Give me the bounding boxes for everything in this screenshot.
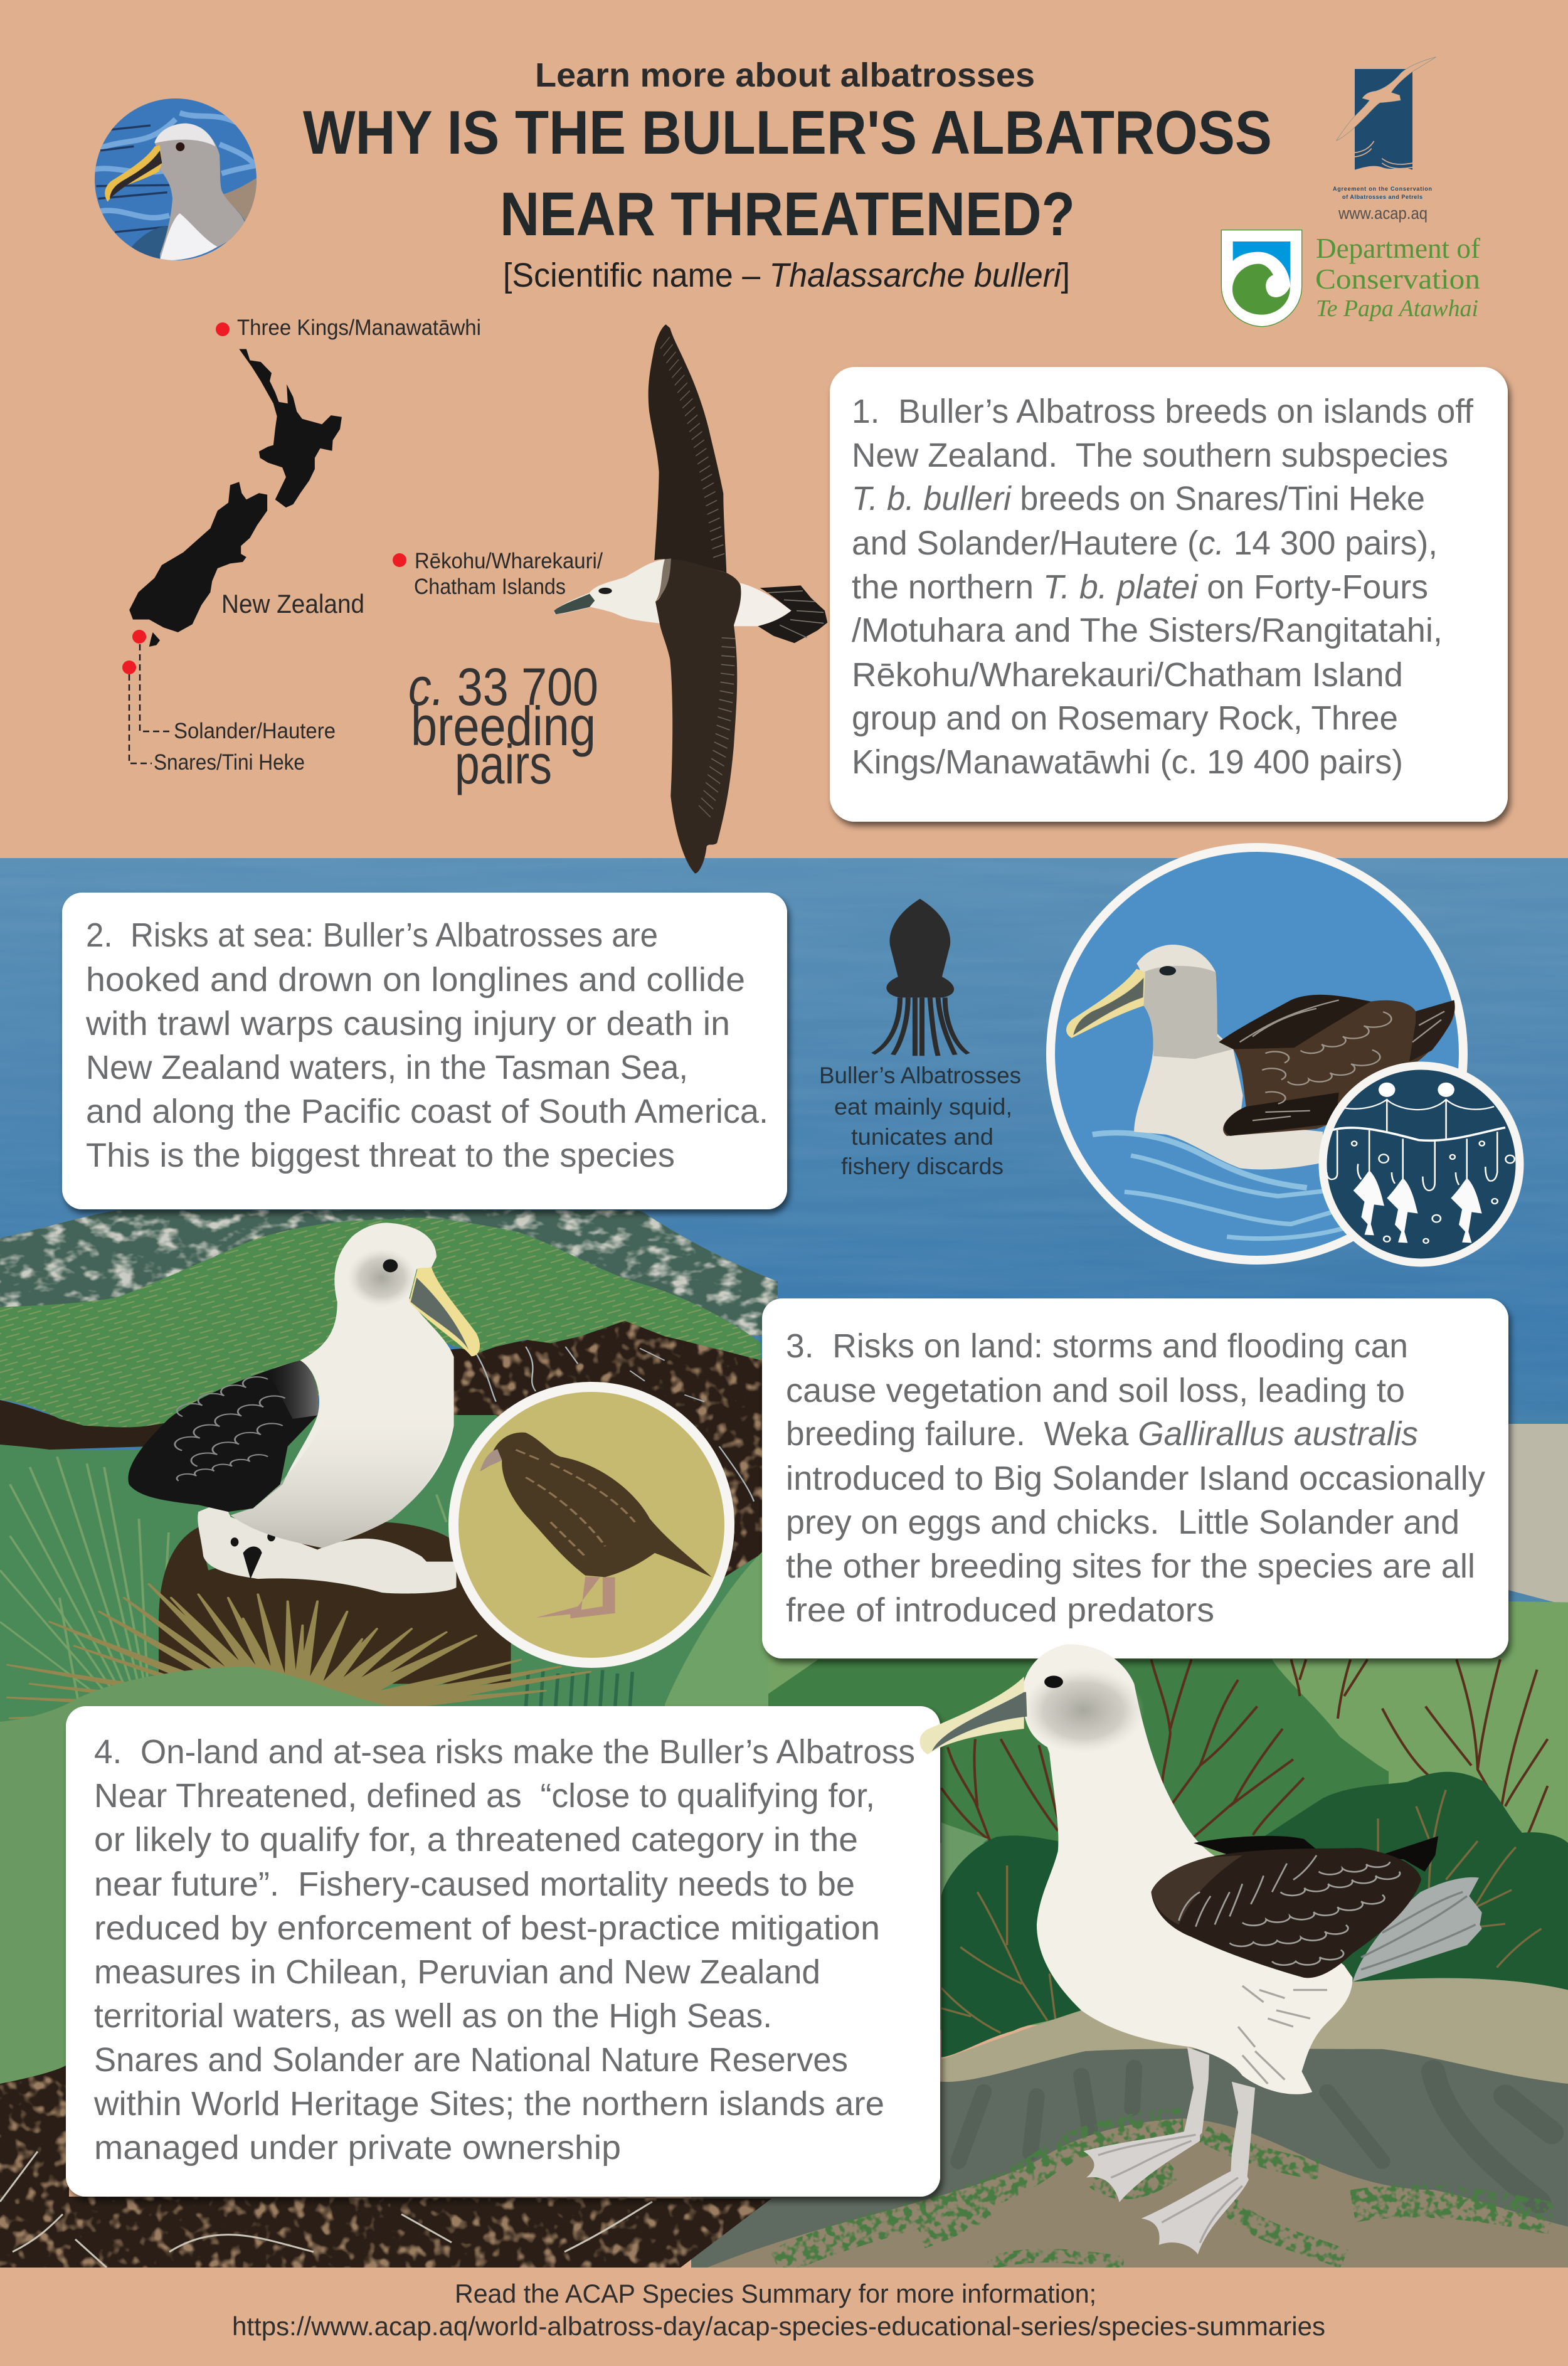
green hill (0, 1217, 761, 1427)
white breast (160, 213, 218, 260)
bill plate (932, 1692, 1027, 1751)
panel 1 text: Kings/Manawatāwhi (c. 19 400 pairs) (852, 743, 1403, 781)
panel 4 text: Snares and Solander are National Nature Reserves (94, 2041, 848, 2079)
panel 2: risks at sea (62, 893, 787, 1209)
map labels: Chatham Islands (414, 575, 566, 599)
panel 4 text: 4. On-land and at-sea risks make the Buller’s Albatross (94, 1733, 915, 1771)
adult body (231, 1223, 454, 1548)
branches behind (941, 1660, 1548, 1841)
eye (176, 142, 184, 151)
water (94, 98, 259, 263)
ACAP logo (1337, 57, 1436, 170)
left soil bank (0, 1400, 179, 1450)
grey rock (691, 2049, 1568, 2271)
map labels: New Zealand (221, 589, 364, 618)
net gear (1327, 1083, 1515, 1243)
light green background (759, 1590, 1568, 2039)
panel 1 text: /Motuhara and The Sisters/Rangitatahi, (852, 612, 1443, 649)
wing shadow fade (268, 1361, 318, 1419)
lower left hill (0, 1667, 439, 2095)
wing feathers (175, 1377, 285, 1481)
panel 4 text: Near Threatened, defined as “close to qualifying for, (94, 1777, 875, 1815)
photo of albatross head (94, 98, 259, 263)
diet caption: tunicates and (851, 1124, 993, 1150)
panel 1 text: New Zealand. The southern subspecies (852, 437, 1448, 474)
crown (155, 124, 215, 146)
diet caption: Buller’s Albatrosses (819, 1063, 1021, 1088)
rock (132, 226, 169, 262)
swimming bird (1066, 945, 1455, 1239)
panel 2 text: 2. Risks at sea: Buller’s Albatrosses are (86, 916, 658, 954)
footer text: Read the ACAP Species Summary for more information; (455, 2279, 1096, 2308)
wing (1151, 1848, 1421, 1978)
panel 2 text: with trawl warps causing injury or death in (85, 1005, 730, 1042)
heading block (303, 56, 1272, 294)
head shading (1022, 1668, 1145, 1753)
head and neck (554, 559, 665, 623)
chick (198, 1502, 457, 1594)
panel 2 text: This is the biggest threat to the species (86, 1137, 675, 1174)
DOC wordmark (1315, 232, 1481, 322)
footer band (0, 2268, 1568, 2366)
nest with sitting albatross and chick (128, 1223, 511, 1684)
panel 2 text: New Zealand waters, in the Tasman Sea, (86, 1049, 688, 1086)
panel 1 text: T. b. bulleri breeds on Snares/Tini Heke (852, 480, 1425, 517)
water dark streaks (96, 125, 171, 232)
south island (129, 482, 267, 632)
standing albatross (919, 1644, 1482, 2254)
weka bird (480, 1433, 712, 1618)
lower wing feathers (702, 638, 729, 818)
panel 4 text: reduced by enforcement of best-practice mitigation (94, 1909, 880, 1947)
bill (919, 1677, 1024, 1754)
panel 1 text: group and on Rosemary Rock, Three (852, 699, 1398, 737)
breeding pairs statistic: pairs (455, 733, 552, 795)
panel 4: conclusion (66, 1706, 940, 2197)
face shading (347, 1249, 416, 1307)
ACAP text: www.acap.aq (1338, 204, 1428, 223)
wing shoulder (1151, 1855, 1242, 1924)
bird (1337, 57, 1436, 141)
moss patches (776, 2123, 1552, 2263)
ground mound (700, 2118, 1568, 2271)
chick face (231, 1532, 275, 1579)
panel 3 text: breeding failure. Weka Gallirallus australis (786, 1415, 1418, 1453)
foot lines (1098, 2135, 1242, 2243)
wing (128, 1361, 318, 1512)
map markers (122, 322, 406, 674)
mid-green bush (759, 1660, 1389, 1843)
panel 3 text: the other breeding sites for the species are all (786, 1547, 1475, 1585)
rocky mountain (0, 1207, 822, 1339)
right soil bank (450, 1321, 762, 1577)
sea disk (1051, 847, 1463, 1260)
map labels: Snares/Tini Heke (154, 750, 305, 775)
footer text: https://www.acap.aq/world-albatross-day/acap-species-educational-series/species-summaries (232, 2311, 1325, 2341)
stewart island (149, 632, 160, 647)
legs (1183, 2047, 1255, 2192)
blue panel (1355, 69, 1412, 170)
weka circle (453, 1387, 729, 1663)
diet caption: eat mainly squid, (834, 1094, 1012, 1120)
panel 3 text: introduced to Big Solander Island occasionally (786, 1460, 1485, 1497)
body and lower wing (655, 559, 743, 874)
panel 3: risks on land (762, 1298, 1508, 1658)
left dark bush (941, 1835, 1081, 2057)
meadow, soil and nest ground (0, 1317, 771, 1731)
DOC wordmark: Department of (1316, 232, 1481, 264)
dashed leader lines (129, 644, 172, 763)
main title: NEAR THREATENED? (500, 179, 1075, 248)
diet caption (819, 1063, 1021, 1179)
nest (159, 1522, 511, 1684)
panel 2 text: and along the Pacific coast of South America. (86, 1093, 768, 1130)
squid silhouette (873, 899, 968, 1056)
panel 2 text (85, 916, 768, 1174)
map labels: Three Kings/Manawatāwhi (237, 316, 481, 340)
rump (734, 583, 792, 626)
panel 1 text: the northern T. b. platei on Forty-Fours (852, 568, 1428, 606)
panel 3 text: 3. Risks on land: storms and flooding can (786, 1327, 1408, 1365)
diet caption: fishery discards (841, 1154, 1004, 1179)
panel 4 text: managed under private ownership (94, 2129, 621, 2167)
breeding pairs statistic: breeding (411, 695, 596, 757)
squid arms (873, 997, 968, 1056)
right grey cliff (1508, 1424, 1568, 1606)
meadow grass blades (0, 1456, 632, 1708)
map labels: Rēkohu/Wharekauri/ (415, 549, 603, 573)
map of New Zealand (129, 349, 342, 647)
body (1022, 1644, 1353, 2094)
main title (303, 98, 1272, 248)
tail feather lines (1361, 1892, 1476, 1970)
net circle: longline hooks and fish (1323, 1066, 1520, 1263)
sea circle: albatross on water (1051, 847, 1463, 1260)
footer text (232, 2279, 1325, 2341)
panel 3 text (786, 1327, 1485, 1629)
map labels: Solander/Hautere (174, 719, 336, 743)
breeding pairs statistic: c. 33 700 (408, 657, 598, 716)
ACAP text: of Albatrosses and Petrels (1342, 194, 1422, 200)
tussock grass (8, 1584, 590, 1718)
map labels (154, 316, 603, 775)
brown back (223, 178, 257, 224)
learn more: Learn more about albatrosses (535, 56, 1035, 94)
bill plate (110, 151, 162, 199)
rock streaks (958, 2067, 1552, 2202)
tail lines (767, 591, 824, 638)
panel 4 text: measures in Chilean, Peruvian and New Zealand (94, 1953, 820, 1991)
bill (105, 146, 162, 202)
tail (758, 585, 827, 643)
body shading (231, 1416, 454, 1548)
right dark bush (1264, 1772, 1568, 1990)
lower soil (0, 2057, 778, 2268)
feet (1083, 2126, 1249, 2254)
panel 3 text: free of introduced predators (786, 1591, 1214, 1629)
water highlights (94, 113, 257, 218)
panel 4 text (93, 1733, 915, 2167)
eye (598, 588, 612, 594)
soil veins (476, 1347, 754, 1502)
bill plate (411, 1278, 469, 1350)
main title: WHY IS THE BULLER'S ALBATROSS (303, 98, 1272, 167)
tan branches on bushes (941, 1790, 1541, 2033)
panel 2 text: hooked and drown on longlines and collide (86, 961, 745, 999)
panel 3 text: prey on eggs and chicks. Little Solander and (786, 1504, 1459, 1541)
panel 1 text: Rēkohu/Wharekauri/Chatham Island (852, 656, 1403, 694)
panel 1 text (852, 393, 1474, 781)
breeding pairs statistic (408, 657, 598, 795)
waves (1355, 141, 1412, 169)
lower right scenery (691, 1590, 1568, 2271)
tail (1353, 1877, 1482, 1981)
bill (554, 594, 595, 614)
DOC wordmark: Te Papa Atawhai (1316, 295, 1478, 322)
upper wing feathers (665, 342, 719, 558)
ocean background (0, 858, 1568, 1636)
DOC wordmark: Conservation (1315, 263, 1480, 295)
panel 4 text: or likely to qualify for, a threatened category in the (94, 1821, 858, 1859)
DOC shield (1221, 230, 1302, 327)
wing feather rows (1179, 1855, 1400, 1965)
panel 1: breeding (830, 367, 1508, 822)
panel 4 text: territorial waters, as well as on the High Seas. (94, 1997, 772, 2035)
panel 1 text: 1. Buller’s Albatross breeds on islands off (852, 393, 1474, 430)
panel 1 text: and Solander/Hautere (c. 14 300 pairs), (852, 524, 1438, 562)
breast feathers (1238, 1986, 1327, 2084)
squid mantle (886, 899, 954, 997)
ACAP text: Agreement on the Conservation (1333, 186, 1432, 192)
panel 3 text: cause vegetation and soil loss, leading to (786, 1372, 1405, 1409)
right hill by weka circle (665, 1546, 768, 1712)
back wing tips (1194, 1836, 1438, 1872)
eye (1044, 1676, 1063, 1688)
north island (239, 349, 342, 507)
pale strip (941, 1823, 988, 1896)
ACAP text (1333, 186, 1432, 223)
upper wing (649, 324, 726, 573)
net disk (1323, 1066, 1520, 1263)
weka background (453, 1387, 729, 1663)
neck shade (655, 558, 671, 602)
sand band (941, 1978, 1568, 2088)
flying albatross (554, 324, 827, 874)
eye (383, 1260, 398, 1272)
neck and head (155, 124, 246, 260)
panel 4 text: near future”. Fishery-caused mortality needs to be (94, 1865, 855, 1903)
bill (409, 1268, 480, 1356)
scientific name: [Scientific name – Thalassarche bulleri] (503, 257, 1070, 294)
panel 4 text: within World Heritage Sites; the northern islands are (93, 2085, 884, 2123)
